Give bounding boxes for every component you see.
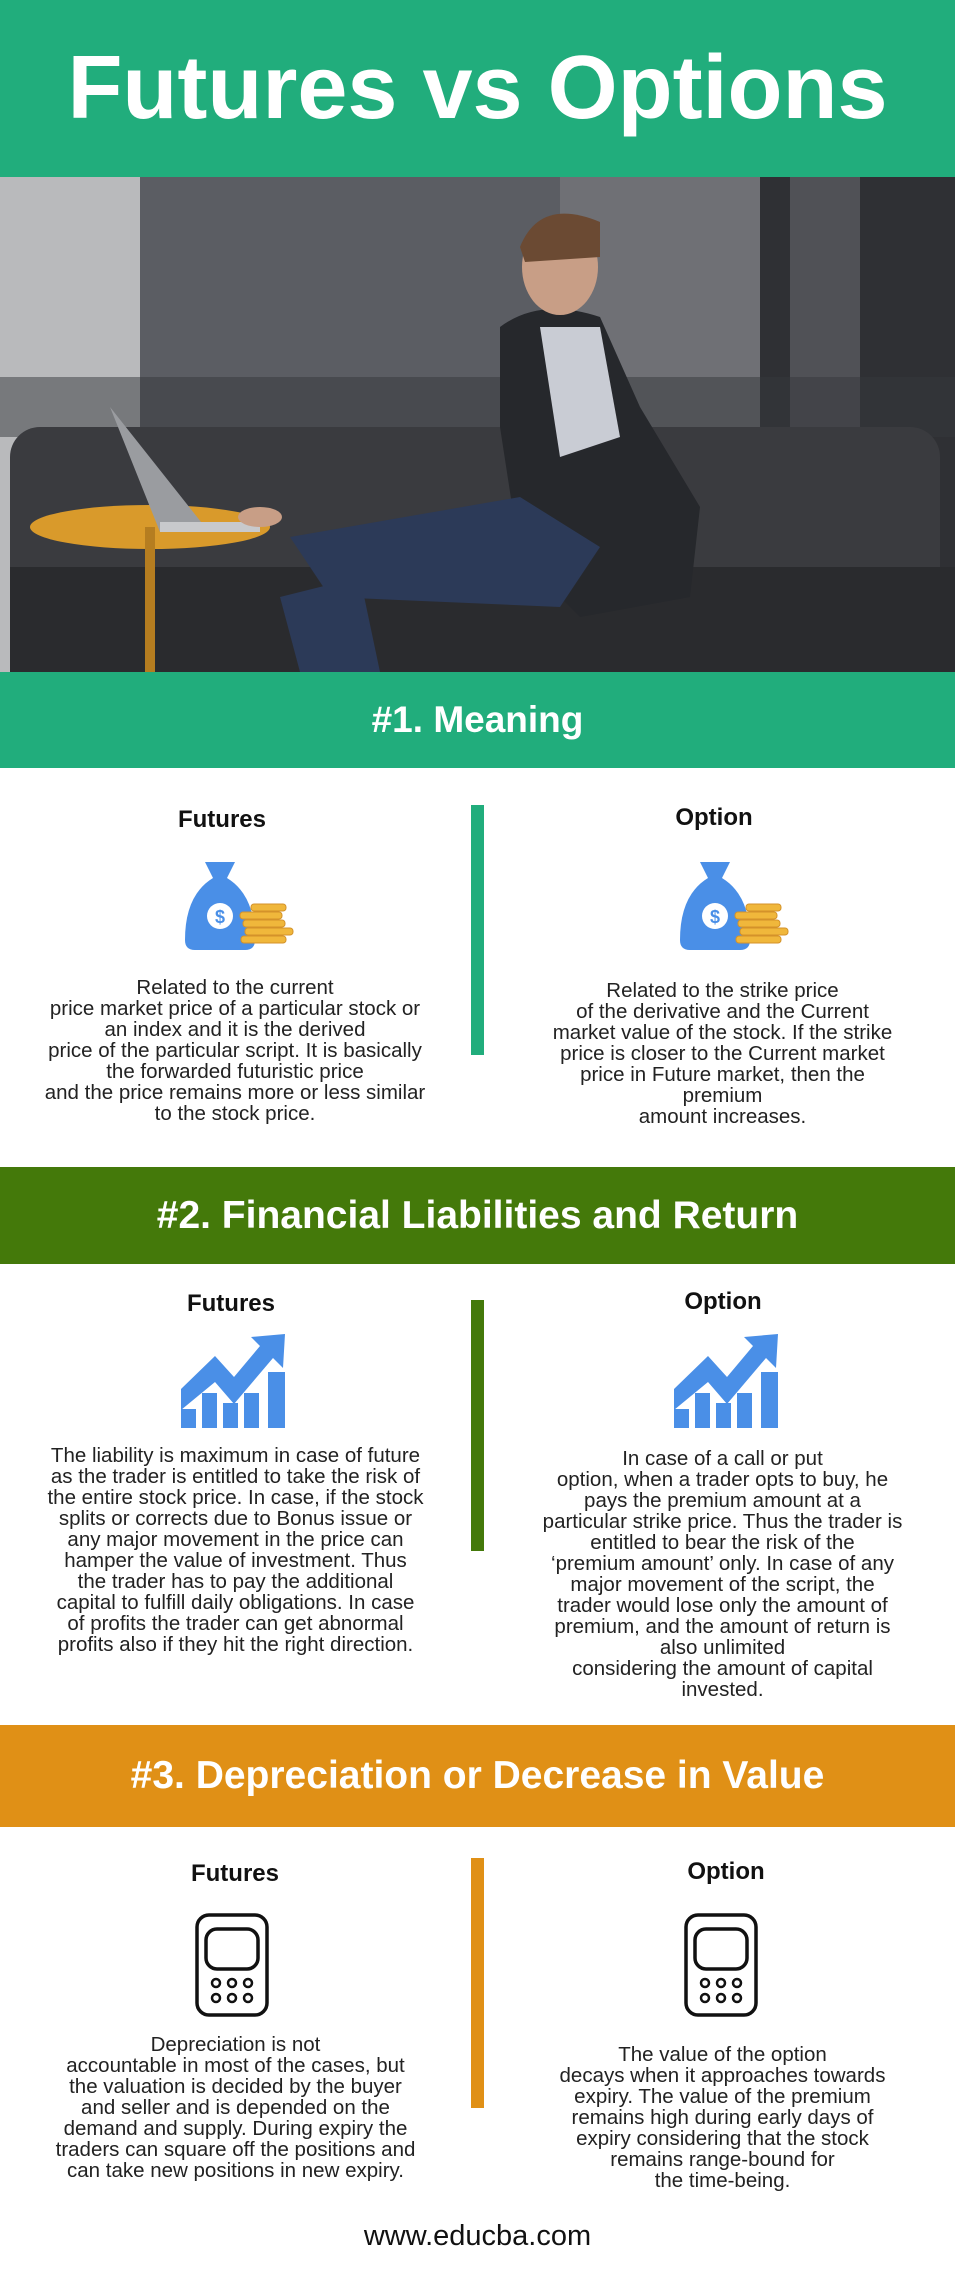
text: option depreciation: the time-being. [655, 2169, 790, 2192]
label: option: Option [675, 804, 753, 831]
text: option depreciation: expiry. The value of the premium [574, 2085, 871, 2108]
text: futures liabilities: the trader has to pay the additional [78, 1570, 393, 1593]
text: option liabilities: invested. [681, 1678, 764, 1701]
text: futures liabilities: any major movement in the price can [67, 1528, 404, 1551]
text: option liabilities: In case of a call or put [622, 1447, 823, 1470]
text: futures meaning [45, 976, 425, 1125]
text: futures depreciation: can take new positions in new expiry. [67, 2159, 404, 2182]
text: futures liabilities: capital to fulfill daily obligations. In case [57, 1591, 414, 1614]
text: futures liabilities: profits also if they hit the right direction. [58, 1633, 413, 1656]
panel: meaning option [553, 804, 892, 1128]
text: futures depreciation [56, 2033, 415, 2182]
panel: depreciation option [560, 1858, 885, 2192]
text: option depreciation: decays when it approaches towards [560, 2064, 885, 2087]
text: futures liabilities: The liability is maximum in case of future [51, 1444, 420, 1467]
section header: #3 [0, 1725, 955, 1827]
text: option liabilities: particular strike price. Thus the trader is [543, 1510, 902, 1533]
icon: growth chart [181, 1334, 285, 1428]
section header: #1 Meaning [0, 672, 955, 768]
label: option: Option [687, 1858, 765, 1885]
section header: #2: #2. Financial Liabilities and Return [157, 1194, 798, 1237]
text: option meaning: market value of the stock. If the strike [553, 1021, 892, 1044]
label: futures: Futures [191, 1860, 279, 1887]
text: option meaning: amount increases. [639, 1105, 806, 1128]
text: futures meaning: an index and it is the derived [104, 1018, 365, 1041]
text: futures meaning: the forwarded futuristic price [106, 1060, 364, 1083]
text: option liabilities: also unlimited [660, 1636, 785, 1659]
text: option depreciation: The value of the option [618, 2043, 827, 2066]
text: option meaning: Related to the strike price [606, 979, 839, 1002]
label: futures: Futures [187, 1290, 275, 1317]
text: futures meaning: price market price of a particular stock or [50, 997, 420, 1020]
text: futures depreciation: and seller and is depended on the [81, 2096, 390, 2119]
panel: liabilities futures [47, 1290, 424, 1656]
text: option meaning: price is closer to the Current market [560, 1042, 885, 1065]
text: futures liabilities: splits or corrects due to Bonus issue or [59, 1507, 412, 1530]
icon: money bag: $ [710, 907, 720, 927]
text: option liabilities [543, 1447, 902, 1701]
text: option depreciation: expiry considering that the stock [576, 2127, 869, 2150]
text: option depreciation: remains range-bound for [610, 2148, 835, 2171]
text: futures liabilities: as the trader is entitled to take the risk of [51, 1465, 420, 1488]
label: option: Option [684, 1288, 762, 1315]
title band [0, 0, 955, 177]
icon: growth chart [674, 1334, 778, 1428]
text: option liabilities: entitled to bear the risk of the [590, 1531, 855, 1554]
divider: section 2 [471, 1300, 484, 1551]
photo: man with laptop on sofa [0, 177, 955, 672]
text: futures liabilities: hamper the value of investment. Thus [64, 1549, 407, 1572]
panel: depreciation futures [56, 1860, 415, 2182]
icon: money bag [185, 862, 294, 950]
icon: calculator [195, 1913, 269, 2017]
text: futures meaning: Related to the current [136, 976, 334, 999]
footer: website: www.educba.com [364, 2220, 591, 2252]
section header: #2 [0, 1167, 955, 1264]
label: futures: Futures [178, 806, 266, 833]
text: option liabilities: considering the amount of capital [572, 1657, 873, 1680]
text: futures depreciation: Depreciation is not [151, 2033, 320, 2056]
text: option liabilities: ‘premium amount’ only. In case of any [551, 1552, 894, 1575]
text: option meaning [553, 979, 892, 1128]
text: futures liabilities: the entire stock price. In case, if the stock [47, 1486, 424, 1509]
text: futures liabilities: of profits the trader can get abnormal [67, 1612, 404, 1635]
section header: #3: #3. Depreciation or Decrease in Value [131, 1754, 824, 1797]
text: option liabilities: pays the premium amount at a [584, 1489, 861, 1512]
divider: section 1 [471, 805, 484, 1055]
text: futures depreciation: traders can square off the positions and [56, 2138, 415, 2161]
title band: Futures vs Options [67, 38, 888, 138]
text: option liabilities: trader would lose only the amount of [557, 1594, 888, 1617]
text: futures meaning: and the price remains more or less similar [45, 1081, 425, 1104]
icon: money bag [680, 862, 788, 950]
text: option liabilities: major movement of the script, the [570, 1573, 875, 1596]
text: futures depreciation: demand and supply. During expiry the [64, 2117, 407, 2140]
text: option meaning: of the derivative and the Current [576, 1000, 869, 1023]
text: option depreciation: remains high during early days of [572, 2106, 873, 2129]
text: futures depreciation: the valuation is decided by the buyer [69, 2075, 402, 2098]
icon: money bag: $ [215, 907, 225, 927]
icon: calculator [684, 1913, 758, 2017]
text: option depreciation [560, 2043, 885, 2192]
text: option meaning: premium [683, 1084, 762, 1107]
text: futures meaning: to the stock price. [155, 1102, 315, 1125]
text: futures liabilities [47, 1444, 424, 1656]
text: option liabilities: option, when a trader opts to buy, he [557, 1468, 888, 1491]
text: option liabilities: premium, and the amount of return is [554, 1615, 891, 1638]
text: option meaning: price in Future market, then the [580, 1063, 865, 1086]
divider: section 3 [471, 1858, 484, 2108]
section header: #1 Meaning: #1. Meaning [372, 699, 583, 740]
text: futures meaning: price of the particular script. It is basically [48, 1039, 422, 1062]
panel: liabilities option [543, 1288, 902, 1701]
panel: meaning futures [45, 806, 425, 1125]
text: futures depreciation: accountable in most of the cases, but [66, 2054, 405, 2077]
